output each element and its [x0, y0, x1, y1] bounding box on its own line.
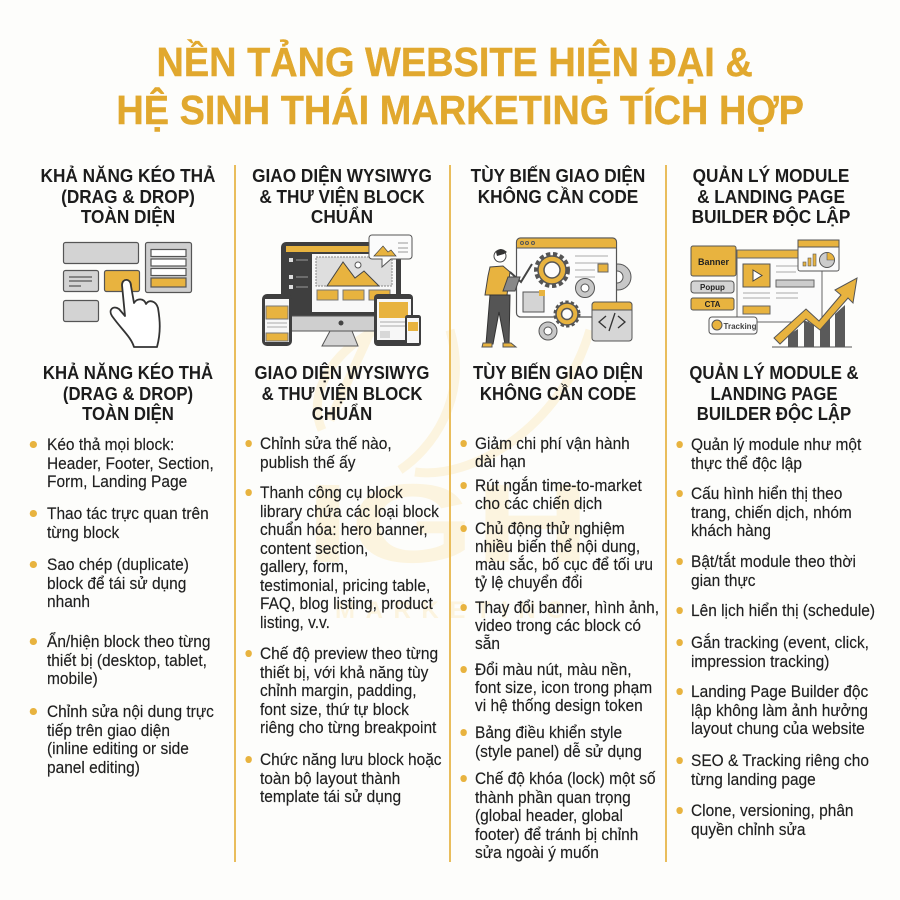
bullet — [691, 752, 869, 789]
bullet — [47, 703, 214, 777]
bullet — [47, 505, 209, 542]
bullet: FAQ, blog listing, product — [260, 594, 433, 613]
bullet — [691, 634, 869, 671]
bullet: testimonial, pricing table, — [260, 576, 430, 594]
bullet — [475, 520, 653, 592]
icon: modules and growth chart — [690, 240, 858, 348]
bullet: Chỉnh sửa thế nào, — [260, 434, 392, 453]
bullet: Thay đổi banner, hình ảnh, — [475, 598, 659, 617]
heading: wysiwyg lower: GIAO DIỆN WYSIWYG — [255, 362, 429, 383]
icon: modules and growth chart: CTA — [705, 300, 721, 309]
bullet: content section, — [260, 538, 368, 558]
bullet: publish thế ấy — [260, 452, 355, 472]
bullet: layout chung của website — [691, 719, 865, 738]
bullet: impression tracking) — [691, 652, 829, 670]
bullet: gallery, form, — [260, 557, 348, 576]
heading: wysiwyg top — [252, 165, 432, 227]
bullet: Giảm chi phí vận hành — [475, 434, 630, 453]
heading: modules lower: BUILDER ĐỘC LẬP — [697, 403, 851, 424]
icon: responsive devices — [262, 234, 421, 346]
bullet: Clone, versioning, phân — [691, 801, 854, 820]
bullet: Chủ động thử nghiệm — [475, 519, 625, 538]
bullet: từng landing page — [691, 770, 816, 788]
bullet: trang, chiến dịch, nhóm — [691, 502, 852, 522]
bullet: Sao chép (duplicate) — [47, 555, 189, 574]
bullet: tỷ lệ chuyển đổi — [475, 573, 583, 592]
bullet: listing, v.v. — [260, 612, 330, 632]
heading: drag and drop top: TOÀN DIỆN — [81, 206, 175, 227]
heading: modules lower — [689, 362, 859, 424]
bullet list: wysiwyg — [245, 434, 442, 806]
bullet — [475, 599, 659, 653]
bullet: khách hàng — [691, 521, 771, 540]
bullet — [260, 645, 438, 738]
heading: customization lower: KHÔNG CẦN CODE — [480, 383, 636, 404]
bullet: thành phần quan trọng — [475, 788, 631, 806]
icon: person and gears — [481, 237, 632, 348]
bullet — [475, 661, 652, 715]
heading: modules top: & LANDING PAGE — [697, 186, 845, 207]
bullet: từng block — [47, 522, 119, 542]
bullet: sẵn — [475, 634, 500, 653]
heading: wysiwyg lower: & THƯ VIỆN BLOCK — [262, 383, 422, 404]
bullet: mobile) — [47, 669, 98, 688]
icon: drag and drop hand — [62, 242, 192, 348]
bullet list: modules — [676, 435, 875, 839]
panel: drag and drop — [30, 165, 215, 777]
heading: customization lower: TÙY BIẾN GIAO DIỆN — [473, 362, 643, 383]
bullet: Kéo thả mọi block: — [47, 435, 174, 454]
bullet — [475, 435, 630, 471]
heading: customization lower — [473, 362, 643, 404]
heading: drag and drop lower: KHẢ NĂNG KÉO THẢ — [43, 362, 213, 383]
bullet: sửa ngoài ý muốn — [475, 843, 599, 862]
title: NỀN TẢNG WEBSITE HIỆN ĐẠI & — [156, 39, 753, 85]
heading: customization top: TÙY BIẾN GIAO DIỆN — [471, 165, 645, 186]
bullet: thiết bị (desktop, tablet, — [47, 650, 207, 670]
panel: no-code customization — [460, 165, 659, 862]
watermark logo: IGH — [306, 461, 590, 586]
bullet: Thanh công cụ block — [260, 483, 403, 502]
bullet — [691, 485, 852, 540]
panel: wysiwyg — [245, 165, 442, 806]
bullet: Chế độ preview theo từng — [260, 644, 438, 663]
heading: wysiwyg lower — [255, 362, 429, 424]
bullet: riêng cho từng breakpoint — [260, 718, 436, 737]
bullet: Chỉnh sửa nội dung trực — [47, 702, 214, 721]
bullet: quyền chỉnh sửa — [691, 820, 805, 838]
icon: modules and growth chart: Banner — [698, 257, 729, 267]
bullet: Ẩn/hiện block theo từng — [47, 632, 210, 651]
heading: wysiwyg top: GIAO DIỆN WYSIWYG — [252, 165, 432, 186]
bullet: tiếp trên giao diện — [47, 720, 170, 740]
bullet — [475, 724, 642, 761]
heading: drag and drop lower: TOÀN DIỆN — [82, 403, 174, 424]
bullet: chuẩn hóa: hero banner, — [260, 520, 428, 539]
bullet: Quản lý module như một — [691, 435, 861, 454]
bullet: Header, Footer, Section, — [47, 454, 214, 472]
bullet: dài hạn — [475, 452, 526, 471]
icon: modules and growth chart: Tracking — [724, 322, 757, 331]
bullet — [691, 802, 854, 839]
bullet: Cấu hình hiển thị theo — [691, 484, 842, 503]
bullet: chỉnh margin, padding, — [260, 681, 417, 700]
bullet: video trong các block có — [475, 616, 641, 635]
heading: modules top — [692, 165, 850, 227]
heading: wysiwyg top: CHUẨN — [311, 206, 373, 227]
heading: modules lower: QUẢN LÝ MODULE & — [689, 362, 859, 383]
bullet: block để tái sử dụng — [47, 574, 186, 592]
bullet — [260, 751, 442, 806]
bullet — [691, 553, 856, 590]
bullet — [475, 770, 656, 862]
bullet: Bật/tắt module theo thời — [691, 552, 856, 571]
bullet — [47, 633, 210, 688]
bullet: nhanh — [47, 592, 90, 611]
bullet: toàn bộ layout thành — [260, 768, 400, 788]
bullet — [691, 436, 861, 473]
heading: drag and drop top — [41, 165, 215, 227]
icon: modules and growth chart: Popup — [700, 283, 725, 292]
bullet: template tái sử dụng — [260, 787, 401, 806]
bullet — [691, 683, 868, 738]
heading: wysiwyg top: & THƯ VIỆN BLOCK — [259, 186, 425, 207]
bullet: Chức năng lưu block hoặc — [260, 750, 442, 769]
bullet: vi hệ thống design token — [475, 696, 643, 715]
bullet — [260, 435, 392, 472]
bullet: font size, icon trong phạm — [475, 678, 652, 697]
bullet: Thao tác trực quan trên — [47, 504, 209, 523]
bullet: thiết bị, với khả năng tùy — [260, 662, 428, 682]
divider 1 — [234, 165, 236, 862]
panel: modules and landing pages — [676, 165, 875, 839]
heading: modules top: BUILDER ĐỘC LẬP — [692, 206, 850, 227]
bullet: lập không làm ảnh hưởng — [691, 700, 868, 720]
heading: modules lower: LANDING PAGE — [710, 383, 838, 404]
bullet: Chế độ khóa (lock) một số — [475, 769, 656, 788]
bullet: thực thể độc lập — [691, 454, 802, 472]
bullet: (global header, global — [475, 806, 623, 825]
title — [116, 39, 804, 133]
bullet: Bảng điều khiển style — [475, 723, 622, 742]
bullet: Form, Landing Page — [47, 472, 187, 491]
bullet: footer) để tránh bị chỉnh — [475, 824, 638, 844]
heading: wysiwyg lower: CHUẨN — [312, 403, 372, 424]
bullet: (style panel) dễ sử dụng — [475, 742, 642, 760]
bullet list: customization — [460, 434, 659, 862]
heading: drag and drop top: (DRAG & DROP) — [61, 186, 195, 207]
bullet: font size, thứ tự block — [260, 700, 409, 718]
bullet: SEO & Tracking riêng cho — [691, 751, 869, 770]
heading: drag and drop top: KHẢ NĂNG KÉO THẢ — [41, 165, 215, 186]
bullet: Rút ngắn time-to-market — [475, 476, 642, 495]
title: HỆ SINH THÁI MARKETING TÍCH HỢP — [116, 87, 804, 133]
bullet: cho các chiến dịch — [475, 494, 602, 513]
divider 3 — [665, 165, 667, 862]
bullet: Đổi màu nút, màu nền, — [475, 660, 632, 679]
bullet: (inline editing or side — [47, 739, 189, 758]
bullet: màu sắc, bố cục để tối ưu — [475, 555, 653, 574]
bullet — [475, 477, 642, 513]
bullet — [260, 484, 439, 632]
bullet: nhiều biến thể nội dung, — [475, 537, 640, 556]
watermark logo: MARKETING — [335, 597, 565, 624]
bullet: Lên lịch hiển thị (schedule) — [691, 601, 875, 620]
divider 2 — [449, 165, 451, 862]
bullet: gian thực — [691, 570, 756, 590]
bullet — [47, 556, 189, 612]
heading: drag and drop lower: (DRAG & DROP) — [63, 383, 193, 404]
bullet: panel editing) — [47, 758, 140, 776]
bullet: Landing Page Builder độc — [691, 682, 868, 701]
heading: drag and drop lower — [43, 362, 213, 424]
bullet: Gắn tracking (event, click, — [691, 633, 869, 652]
bullet: library chứa các loại block — [260, 502, 439, 520]
bullet — [47, 436, 214, 492]
heading: modules top: QUẢN LÝ MODULE — [693, 165, 849, 186]
bullet list: drag and drop — [30, 435, 214, 777]
heading: customization top — [470, 165, 645, 207]
heading: customization top: KHÔNG CẦN CODE — [478, 186, 638, 207]
